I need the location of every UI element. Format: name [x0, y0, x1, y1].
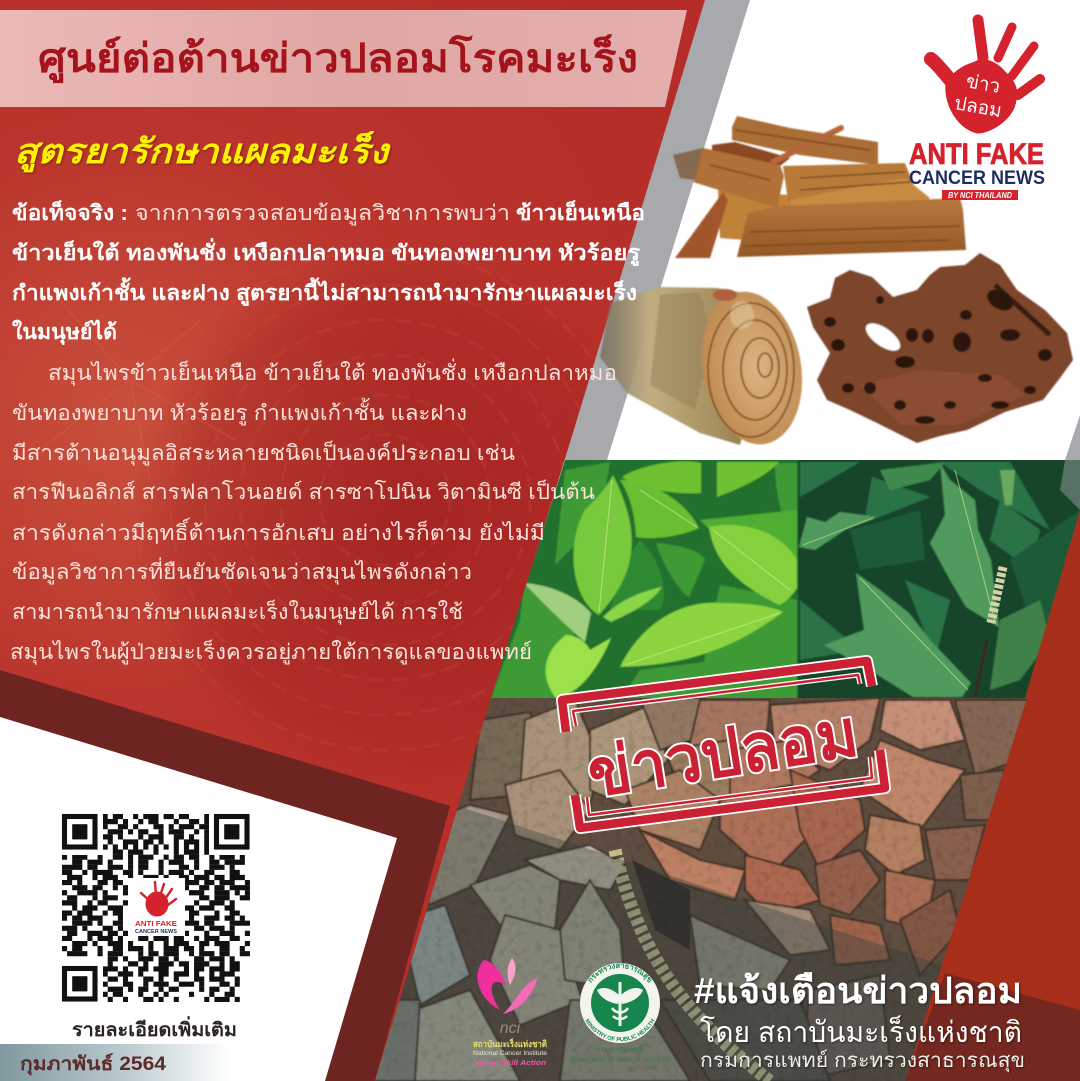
logo: Ministry of Public Health: กรมการแพทย์ [596, 1044, 644, 1054]
hand caption [953, 71, 1003, 122]
logo: Ministry of Public Health [570, 963, 670, 1064]
text block: herb explanation paragraph: ข้อมูลวิชาการที่ยืนยันชัดเจนว่าสมุนไพรดังกล่าว [12, 557, 472, 585]
panel: white QR area [0, 717, 397, 1081]
text block: herb explanation paragraph: มีสารต้านอนุมูลอิสระหลายชนิดเป็นองค์ประกอบ เช่น [12, 439, 515, 466]
text block: fact check paragraph: ข้าวเย็นใต้ ทองพันชั่ง เหงือกปลาหมอ ขันทองพยาบาท หัวร้อยรู [12, 237, 641, 267]
photo: rock pile with dark overlay [370, 698, 1080, 1081]
logo: Ministry of Public Health: DEPARTMENT OF MEDICAL SERVICES [570, 1058, 670, 1064]
text block: herb explanation paragraph: สมุนไพรในผู้ป่วยมะเร็งควรอยู่ภายใต้การดูแลของแพทย์ [10, 638, 532, 665]
text block: herb explanation paragraph: ขันทองพยาบาท หัวร้อยรู กำแพงเก้าชั้น และฝาง [12, 398, 467, 426]
photo: cut log with growth rings [600, 284, 814, 452]
stamp: fake news: ข่าวปลอม [583, 695, 863, 811]
panel: grey stripe right [1065, 415, 1080, 460]
text block: fact check paragraph [12, 199, 645, 346]
text block: herb explanation paragraph [10, 358, 617, 665]
text block: herb explanation paragraph: สารฟีนอลิกส์ สารฟลาโวนอยด์ สารซาโปนิน วิตามินซี เป็นต้น [12, 478, 595, 504]
QR code [62, 814, 250, 1002]
subtitle: สูตรยารักษาแผลมะเร็ง [14, 131, 391, 173]
text block: fake-news alert credit: โดย สถาบันมะเร็งแห่งชาติ [700, 1014, 1022, 1049]
text block: fact check paragraph: กำแพงเก้าชั้น และฝาง สูตรยานี้ไม่สามารถนำมารักษาแผลมะเร็ง [12, 277, 637, 307]
logo: Anti Fake Cancer News [909, 20, 1045, 200]
text block: fact check paragraph: ในมนุษย์ได้ [12, 319, 117, 346]
QR caption: รายละเอียดเพิ่มเติม [72, 1016, 237, 1041]
logo wordmark: ANTI FAKE [909, 138, 1044, 171]
photo: green leaves, two side-by-side herb images [480, 455, 1080, 705]
text block: fake-news alert credit: #แจ้งเตือนข่าวปลอม [694, 970, 1022, 1011]
QR centre logo: CANCER NEWS [135, 929, 177, 935]
text block: herb explanation paragraph: สารดังกล่าวมีฤทธิ์ต้านการอักเสบ อย่างไรก็ตาม ยังไม่มี [12, 517, 545, 545]
panel: main red background with tumour texture [0, 0, 710, 1081]
QR centre logo: ANTI FAKE [135, 919, 177, 928]
hand caption: ข่าว [964, 71, 1002, 98]
banner: title background [0, 10, 687, 107]
panel: right red background [900, 505, 1080, 1081]
text block: herb explanation paragraph: สามารถนำมารักษาแผลมะเร็งในมนุษย์ได้ การใช้ [12, 598, 463, 625]
logo: National Cancer Institute: Vision Skill Action [474, 1060, 546, 1067]
stamp: fake news [562, 661, 885, 828]
QR centre logo [135, 882, 177, 935]
date strip: กุมภาพันธ์ 2564 [20, 1053, 166, 1076]
text block: herb explanation paragraph: สมุนไพรข้าวเย็นเหนือ ข้าวเย็นใต้ ทองพันชั่ง เหงือกปลาหมอ [48, 358, 617, 386]
photo: bark with holes [807, 253, 1073, 443]
title: ศูนย์ต่อต้านข่าวปลอมโรคมะเร็ง [38, 33, 638, 83]
panel: maroon tint bottom right [905, 973, 1080, 1081]
logo: National Cancer Institute: nci [500, 1020, 521, 1037]
text block: fake-news alert credit: กรมการแพทย์ กระทรวงสาธารณสุข [700, 1049, 1025, 1073]
logo: National Cancer Institute [473, 958, 548, 1067]
logo: Ministry of Public Health: กระทรวงสาธารณสุข [588, 963, 652, 983]
logo: National Cancer Institute: National Cancer Institute [473, 1051, 548, 1057]
panel: maroon band under red [0, 670, 450, 1081]
photo: stacked red-brown heartwood planks [673, 116, 966, 258]
logo subtitle: CANCER NEWS [909, 168, 1045, 189]
text block: fact check paragraph: ข้าวเย็นเหนือ [516, 199, 645, 225]
logo tag: BY NCI THAILAND [948, 191, 1012, 200]
date strip [0, 1044, 230, 1081]
text block: fake-news alert credit [694, 970, 1025, 1073]
logo: Ministry of Public Health: MINISTRY OF PUBLIC HEALTH [585, 1018, 655, 1042]
hand caption: ปลอม [953, 93, 1003, 122]
icon: red hand print [931, 20, 1040, 133]
text block: fact check paragraph: ข้อเท็จจริง : [12, 199, 128, 225]
logo: National Cancer Institute: สถาบันมะเร็งแห่งชาติ [473, 1037, 547, 1049]
text block: fact check paragraph: จากการตรวจสอบข้อมูลวิชาการพบว่า [135, 202, 510, 226]
panel: grey diagonal stripe top [560, 0, 750, 460]
